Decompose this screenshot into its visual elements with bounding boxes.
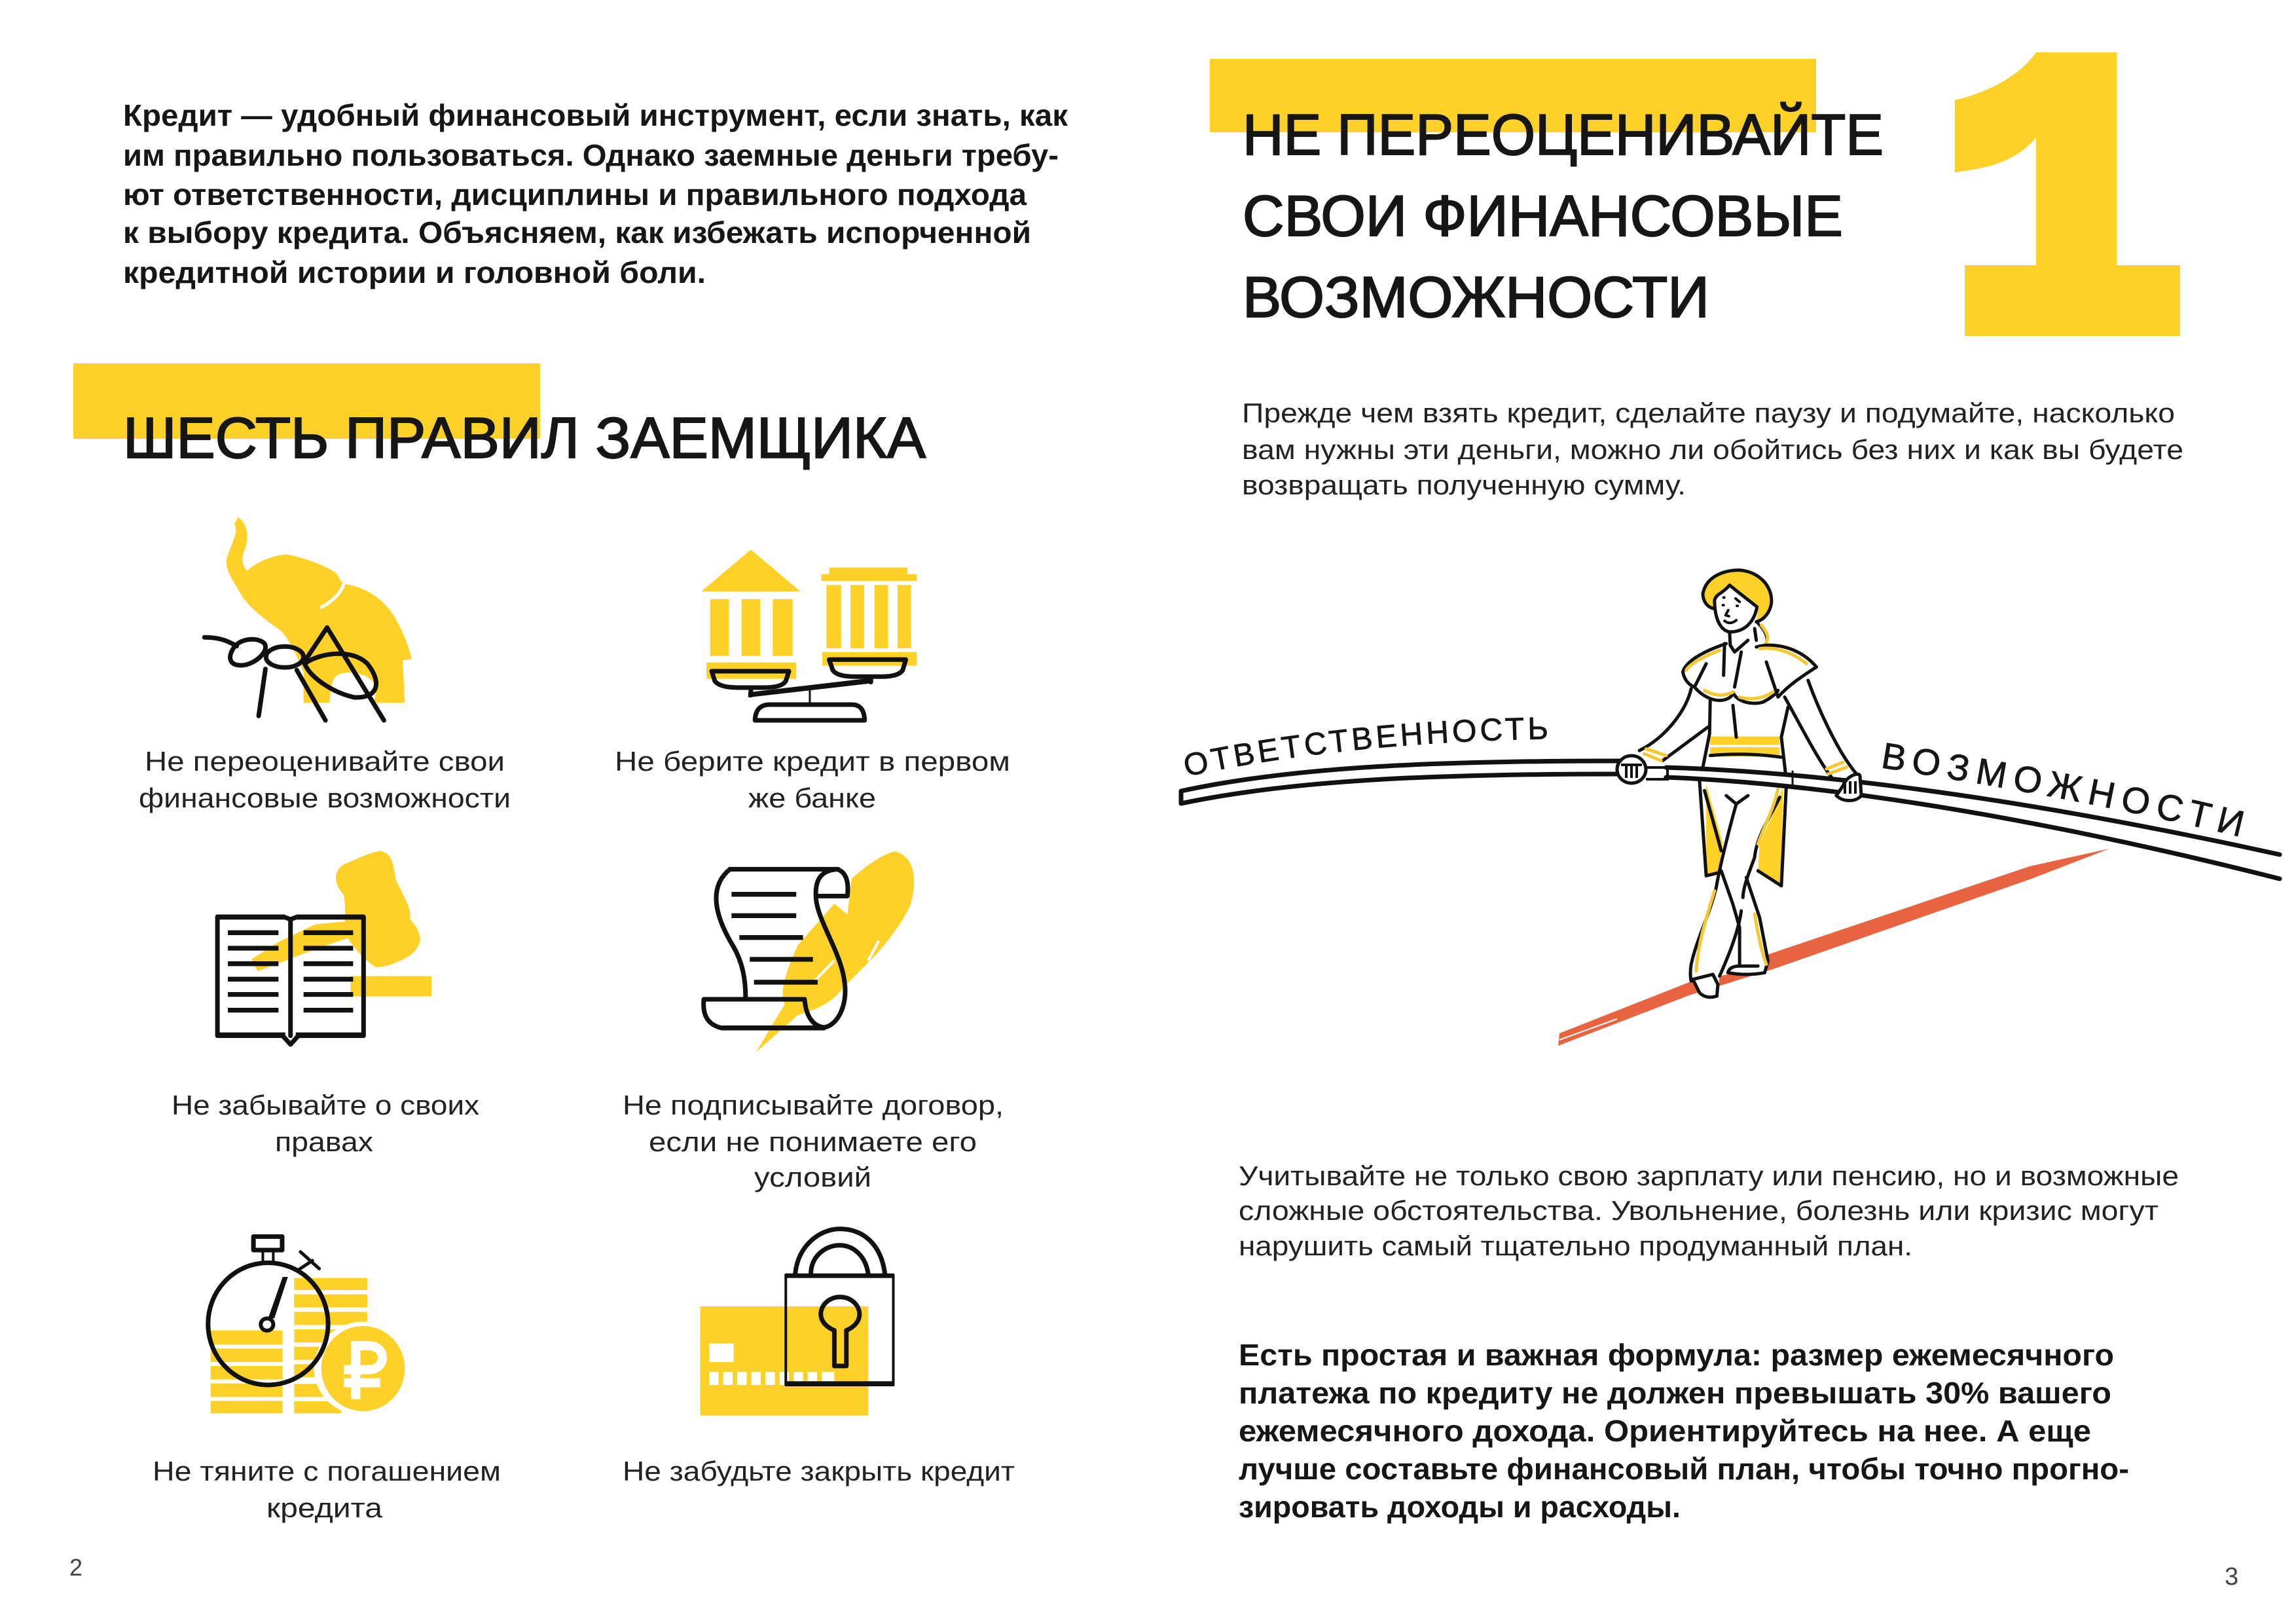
caption: rule 5: кредита <box>266 1492 383 1523</box>
intro text block <box>123 98 1068 289</box>
caption: rule 2: Не берите кредит в первом <box>615 746 1010 777</box>
label: opportunities: ВОЗМОЖНОСТИ <box>1883 743 2244 837</box>
intro text block: Кредит — удобный финансовый инструмент, если знать, как <box>123 98 1068 132</box>
paragraph: pause and think <box>1242 397 2183 500</box>
paragraph: 30% formula: платежа по кредиту не должен превышать 30% вашего <box>1239 1376 2111 1410</box>
paragraph: difficult circumstances: Учитывайте не только свою зарплату или пенсию, но и возможные <box>1239 1160 2179 1191</box>
paragraph: 30% formula: Есть простая и важная формула: размер ежемесячного <box>1239 1338 2114 1372</box>
caption: rule 3 <box>172 1090 479 1157</box>
balance pole <box>1181 761 2280 879</box>
page number 2: 2 <box>69 1554 82 1581</box>
heading: do not overestimate <box>1210 59 1884 329</box>
caption: rule 6: Не забудьте закрыть кредит <box>623 1456 1015 1486</box>
paragraph: difficult circumstances <box>1239 1160 2179 1261</box>
red rope <box>1558 849 2109 1046</box>
caption: rule 3: Не забывайте о своих <box>172 1090 479 1120</box>
icon: elephant and ant <box>204 517 412 720</box>
caption: rule 4: условий <box>754 1162 871 1192</box>
label: responsibility: ОТВЕТСТВЕННОСТЬ <box>1185 717 1547 775</box>
paragraph: 30% formula: ежемесячного дохода. Ориентируйтесь на нее. А еще <box>1239 1414 2091 1448</box>
paragraph: 30% formula: лучше составьте финансовый план, чтобы точно прогно- <box>1239 1452 2129 1486</box>
caption: rule 2 <box>615 746 1010 813</box>
heading: do not overestimate: НЕ ПЕРЕОЦЕНИВАЙТЕ <box>1243 102 1884 167</box>
paragraph: pause and think: вам нужны эти деньги, можно ли обойтись без них и как вы будете <box>1242 434 2183 465</box>
intro text block: кредитной истории и головной боли. <box>123 255 706 289</box>
paragraph: pause and think: возвращать полученную сумму. <box>1242 470 1686 500</box>
woman figure <box>1639 570 1857 997</box>
icon: stopwatch and coins <box>208 1236 412 1416</box>
heading: six rules: ШЕСТЬ ПРАВИЛ ЗАЕМЩИКА <box>123 405 926 470</box>
paragraph: 30% formula <box>1239 1338 2129 1524</box>
caption: rule 3: правах <box>275 1126 373 1157</box>
intro text block: ют ответственности, дисциплины и правильного подхода <box>123 177 1027 212</box>
caption: rule 1: Не переоценивайте свои <box>145 746 505 777</box>
heading: do not overestimate: СВОИ ФИНАНСОВЫЕ <box>1243 183 1843 248</box>
paragraph: difficult circumstances: сложные обстоятельства. Увольнение, болезнь или кризис могут <box>1239 1195 2159 1226</box>
caption: rule 4: если не понимаете его <box>649 1126 977 1157</box>
heading: six rules <box>73 363 926 470</box>
caption: rule 5 <box>153 1456 501 1523</box>
page number 3: 3 <box>2225 1563 2238 1591</box>
paragraph: difficult circumstances: нарушить самый тщательно продуманный план. <box>1239 1230 1912 1261</box>
caption: rule 1 <box>139 746 511 813</box>
big numeral 1 <box>1955 52 2180 336</box>
heading: do not overestimate: ВОЗМОЖНОСТИ <box>1243 265 1709 329</box>
intro text block: им правильно пользоваться. Однако заемные деньги требу- <box>123 138 1059 172</box>
paragraph: pause and think: Прежде чем взять кредит, сделайте паузу и подумайте, насколько <box>1242 397 2175 428</box>
caption: rule 4 <box>623 1090 1004 1192</box>
illustration: woman on tightrope <box>1178 568 2282 1046</box>
intro text block: к выбору кредита. Объясняем, как избежать испорченной <box>123 215 1031 249</box>
icon: scroll and quill <box>704 851 914 1052</box>
icon: bank buildings on scales <box>701 549 917 720</box>
caption: rule 2: же банке <box>748 783 876 813</box>
hands on pole <box>1617 756 1861 800</box>
caption: rule 5: Не тяните с погашением <box>153 1456 501 1486</box>
icon: law book and gavel <box>217 851 431 1044</box>
icon: credit card and padlock <box>701 1229 893 1416</box>
paragraph: 30% formula: зировать доходы и расходы. <box>1239 1490 1681 1524</box>
caption: rule 4: Не подписывайте договор, <box>623 1090 1004 1120</box>
caption: rule 1: финансовые возможности <box>139 783 511 813</box>
